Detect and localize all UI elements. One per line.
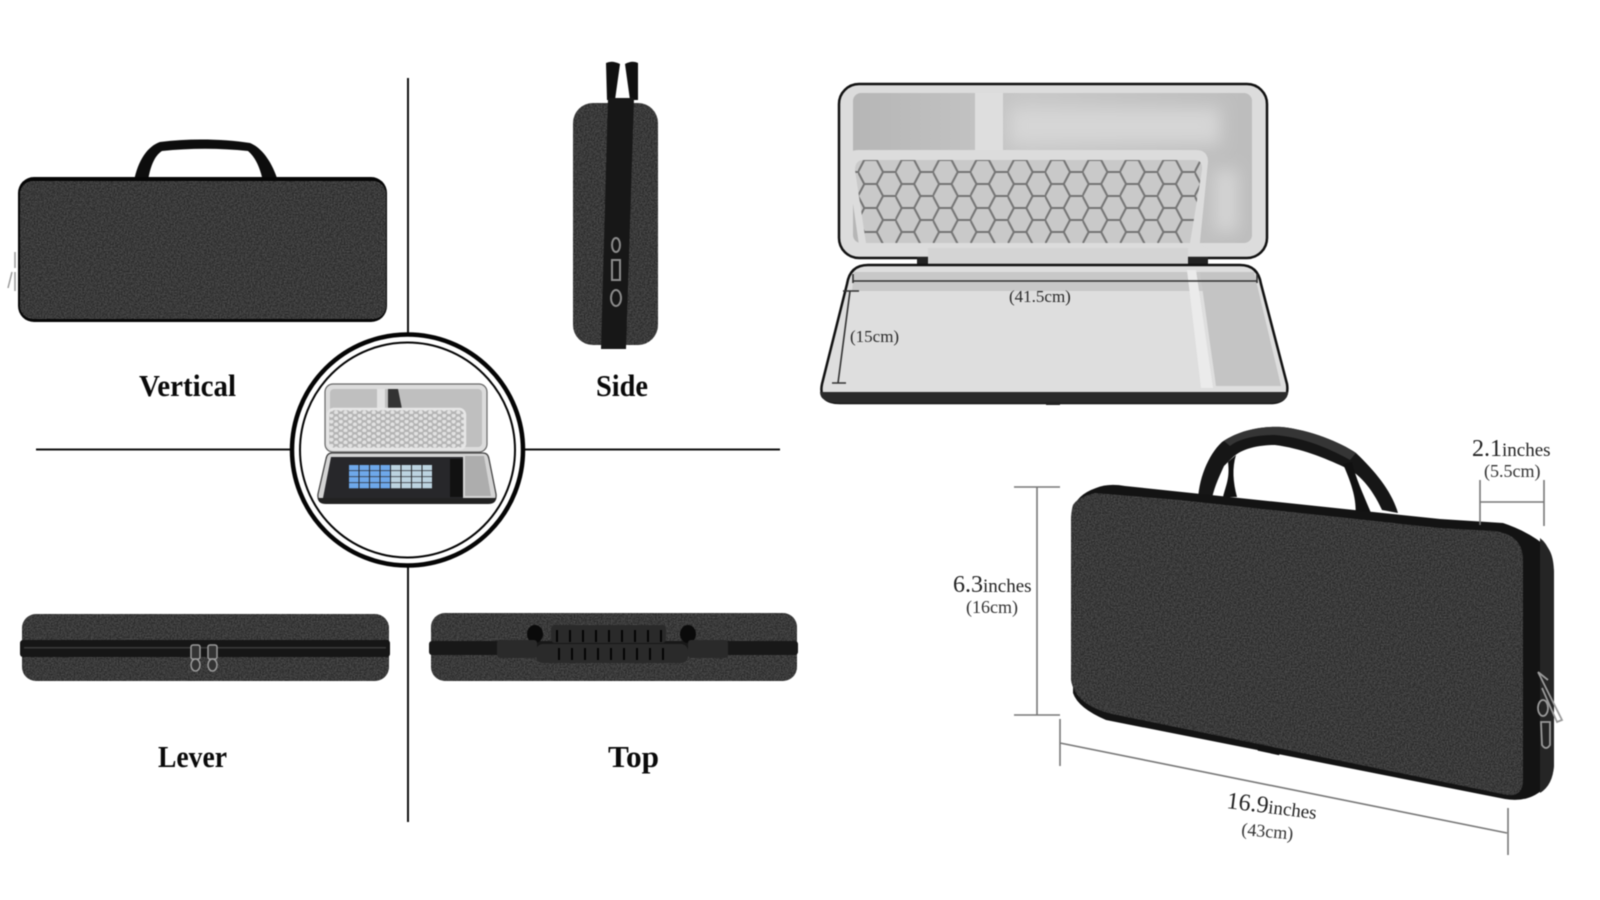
grip ridges — [557, 630, 663, 660]
handle tabs — [497, 640, 537, 658]
mesh pouch — [847, 150, 1208, 252]
handle — [1198, 427, 1398, 518]
open base — [318, 453, 496, 503]
right compartment — [1200, 272, 1281, 386]
case body — [22, 614, 389, 681]
width label: (41.5cm) — [1009, 287, 1071, 306]
width measure — [853, 274, 1257, 283]
case shell — [1073, 485, 1554, 800]
inner strap left — [1223, 455, 1237, 497]
handle grips — [551, 625, 666, 643]
case body — [431, 613, 797, 681]
zipper pull — [8, 252, 15, 291]
length dimension line — [1060, 719, 1508, 855]
depth label: 2.1inches — [1472, 436, 1551, 462]
case body — [20, 181, 386, 319]
right pocket — [465, 456, 491, 496]
mesh pouch — [328, 409, 465, 449]
zipper strip — [601, 98, 634, 349]
height metric label: (16cm) — [966, 597, 1018, 618]
label: Vertical: Vertical — [139, 368, 236, 403]
label: Top: Top — [608, 739, 659, 774]
panel: closed case with dimensions — [953, 427, 1562, 855]
base bottom band — [820, 392, 1288, 403]
depth dimension line — [1480, 480, 1544, 526]
case outline — [18, 177, 387, 322]
length metric label: (43cm) — [1241, 819, 1294, 845]
device — [323, 457, 463, 498]
base upper wall — [852, 272, 1258, 291]
quadrant divider: horizontal line — [36, 448, 780, 450]
panel: vertical view case — [8, 139, 387, 322]
panel: top view case — [429, 613, 798, 681]
handle band — [1198, 427, 1398, 513]
inner strap right — [1343, 462, 1373, 518]
handle gaps — [527, 625, 543, 643]
case body — [573, 103, 658, 345]
label: Lever: Lever — [158, 739, 227, 774]
height label: (15cm) — [850, 327, 899, 346]
hinges — [917, 257, 928, 265]
double ring — [292, 334, 523, 566]
panel: open case interior — [820, 84, 1288, 405]
lid shell — [839, 84, 1267, 258]
spine outer band — [1540, 538, 1554, 793]
height measure — [832, 291, 859, 383]
zipper pulls — [191, 645, 217, 671]
panel: lever view case — [20, 614, 390, 681]
bottom tab — [1258, 746, 1280, 755]
zipper pull — [611, 238, 621, 306]
handle straps — [606, 62, 638, 100]
height label: 6.3inches — [953, 572, 1032, 598]
pad grid — [349, 465, 432, 488]
length label: 16.9inches — [1225, 788, 1318, 825]
height dimension line — [1014, 487, 1060, 715]
panel: center product thumbnail — [292, 334, 523, 566]
quadrant divider: vertical line — [407, 78, 409, 822]
panel: side view case — [573, 62, 658, 349]
depth metric label: (5.5cm) — [1484, 461, 1540, 482]
zipper strip — [429, 641, 798, 655]
handle grip — [1224, 427, 1356, 460]
lid strap — [975, 93, 1003, 151]
honeycomb — [855, 160, 1202, 243]
open lid — [325, 384, 487, 452]
handle — [134, 139, 278, 181]
lid lining — [853, 93, 1252, 243]
label: Side: Side — [596, 368, 648, 403]
zipper pull — [1538, 672, 1562, 748]
front face — [1071, 493, 1523, 795]
lid light area — [1010, 108, 1220, 144]
zipper strip — [20, 640, 390, 657]
lid lower right light area — [1214, 170, 1238, 232]
divider strap — [1187, 270, 1213, 388]
base tray — [821, 265, 1287, 403]
